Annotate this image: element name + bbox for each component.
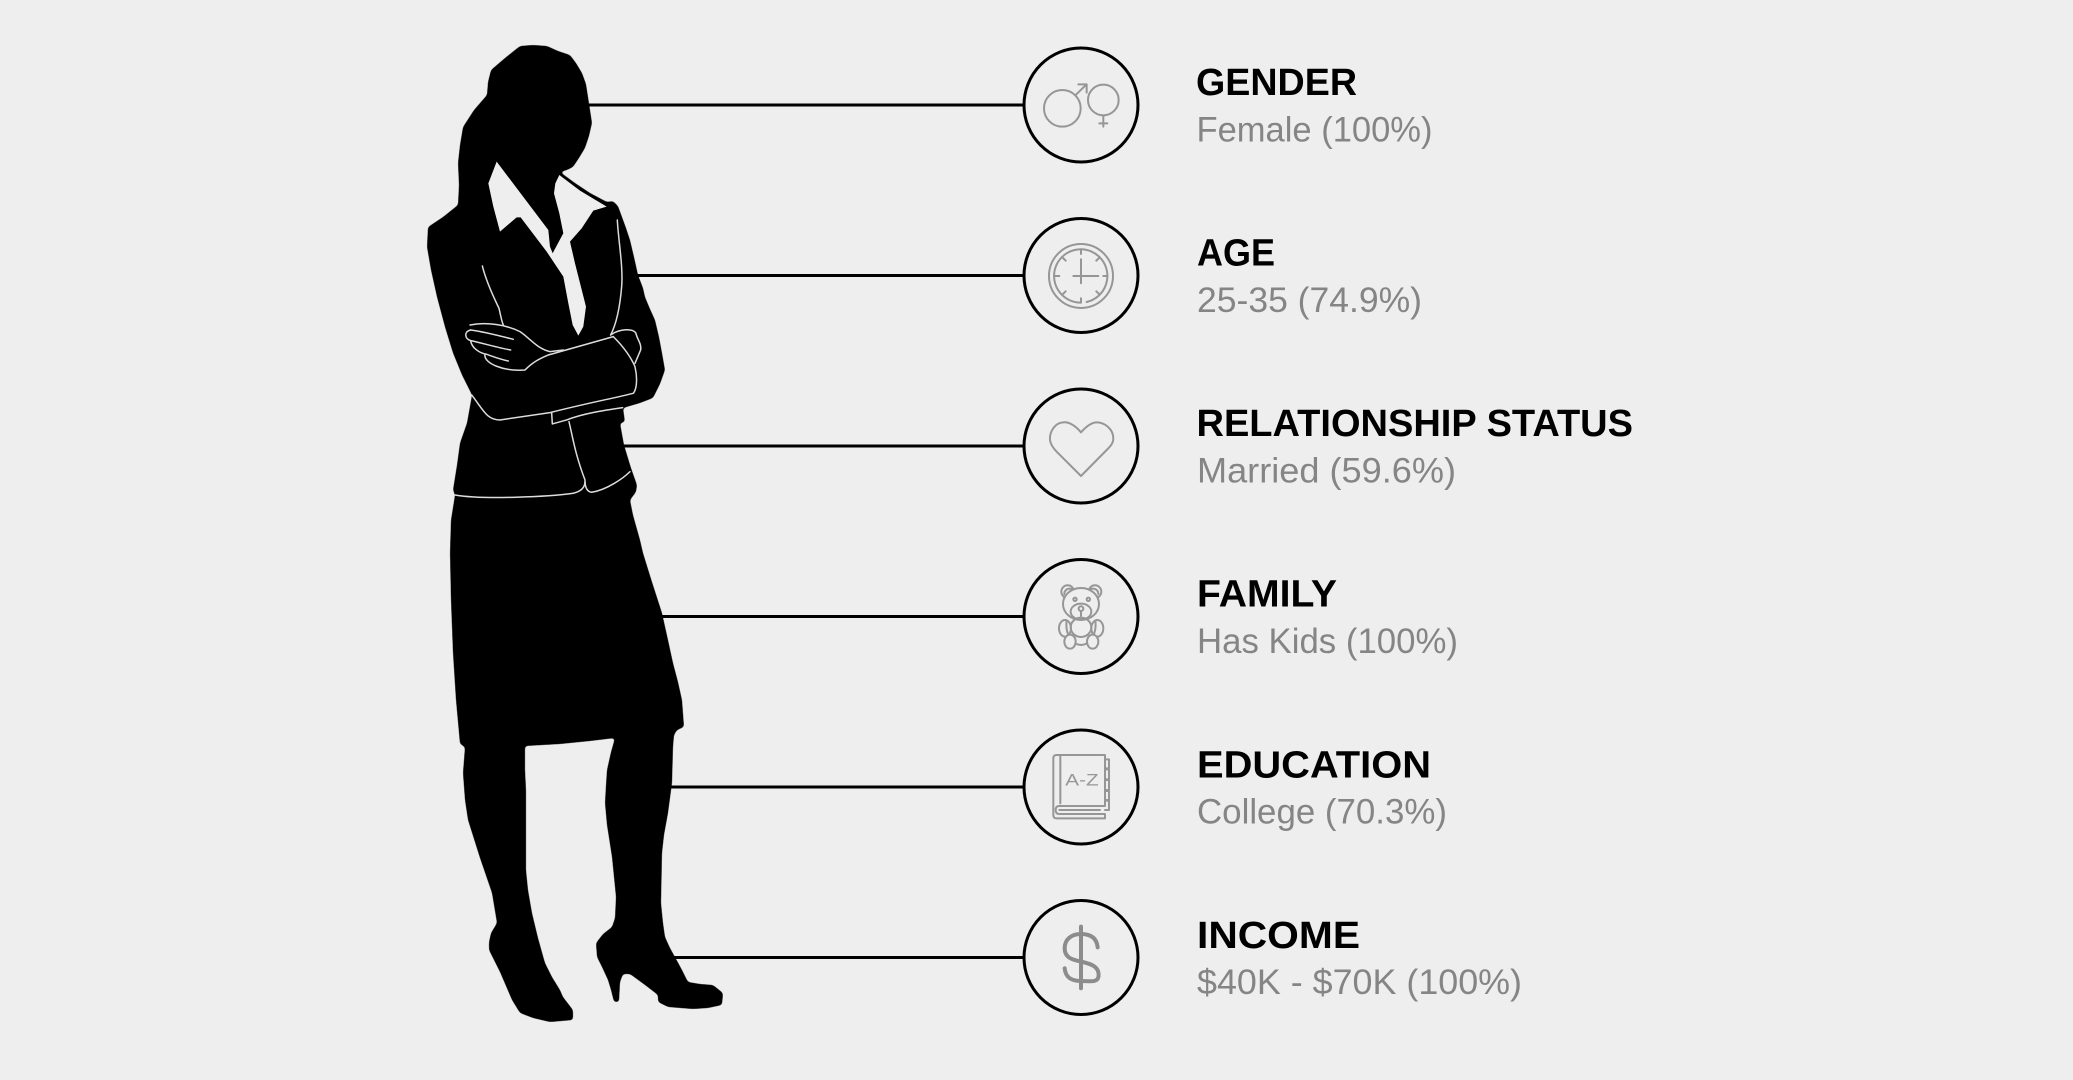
icon circle: income [1024,900,1138,1014]
jacket and arm outlines [455,220,641,498]
connector: income [670,956,1024,959]
value: income: $40K - $70K (100%) [1197,963,1522,1002]
icon: A-Z book [1053,755,1109,818]
icon: gender symbols [1044,84,1119,127]
icon: heart [1050,422,1113,476]
icon: teddy bear [1059,585,1103,649]
value: gender: Female (100%) [1196,110,1432,150]
connector: gender [585,104,1024,106]
row: family [658,560,1458,674]
value: family: Has Kids (100%) [1197,622,1458,661]
icon circle: family [1024,560,1138,674]
value: age: 25-35 (74.9%) [1197,281,1422,320]
row: income [670,900,1522,1014]
connector: education [666,786,1024,788]
value: relationship status: Married (59.6%) [1197,452,1456,490]
heading: income: INCOME [1197,915,1360,957]
value: education: College (70.3%) [1197,792,1447,832]
heading: relationship status: RELATIONSHIP STATUS [1196,403,1633,445]
silhouette: businesswoman [427,45,723,1022]
icon: dollar sign [1065,927,1099,988]
silhouette body [427,45,723,1022]
shirt and collar [488,162,607,336]
icon circle: gender [1024,48,1138,162]
heading: education: EDUCATION [1197,744,1431,786]
icon circle: age [1024,218,1138,332]
heading: gender: GENDER [1196,62,1357,104]
icon: clock [1049,244,1113,308]
row: gender [585,48,1432,162]
connector: age [636,274,1024,277]
icon circle: relationship status [1024,389,1138,503]
icon: A-Z book: A-Z [1065,770,1099,789]
icon circle: education [1024,730,1138,844]
heading: age: AGE [1197,232,1275,274]
row: relationship status [620,389,1633,503]
row: age [636,218,1422,332]
heading: family: FAMILY [1197,574,1337,616]
connector: relationship status [620,444,1024,448]
connector: family [658,615,1024,618]
row: education [666,730,1447,844]
